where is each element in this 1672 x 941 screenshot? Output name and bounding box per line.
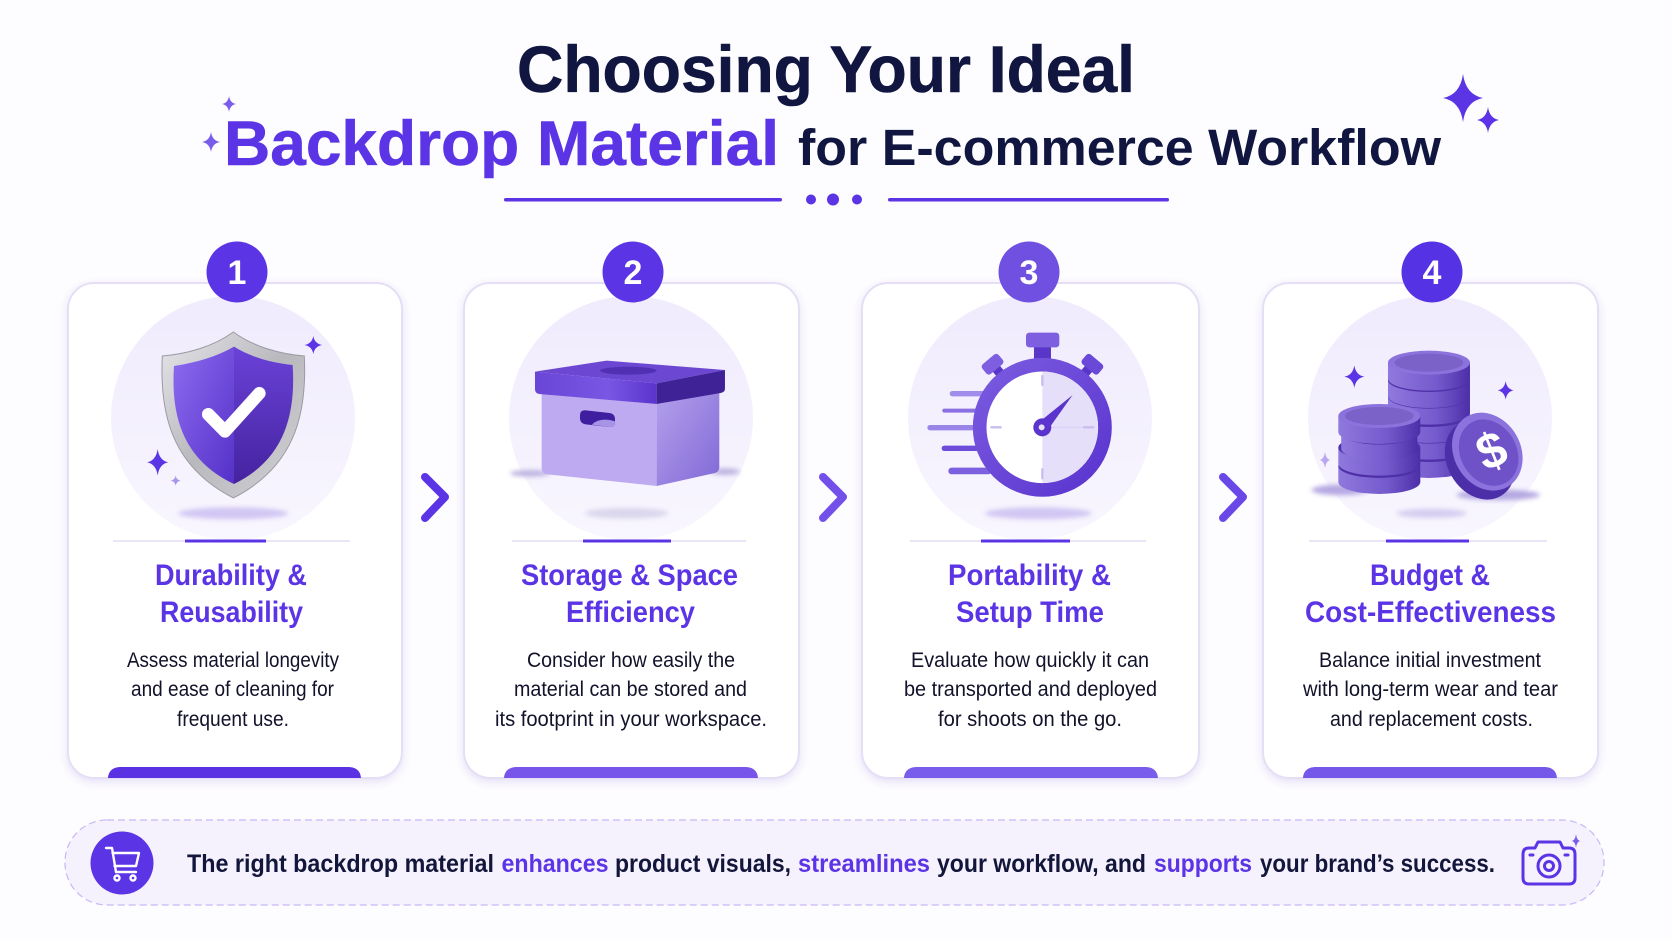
heading: Budget & (1370, 559, 1490, 592)
icon: shield with check (147, 332, 322, 519)
card background (68, 283, 402, 778)
step number badge: 1 (228, 254, 246, 292)
card background (1263, 283, 1598, 778)
description: and replacement costs. (1330, 708, 1533, 731)
accent bar (504, 767, 758, 779)
description: frequent use. (177, 708, 289, 731)
icon backdrop circle (509, 296, 753, 540)
description: Consider how easily the (527, 649, 735, 672)
title line 2 remainder: for E-commerce Workflow (798, 119, 1441, 176)
accent bar (1303, 767, 1557, 779)
heading: Setup Time (956, 596, 1104, 629)
icon: storage box (510, 361, 740, 519)
heading (521, 559, 738, 629)
panel: budget and cost-effectiveness (1263, 242, 1598, 779)
arrow 1 (425, 477, 445, 518)
step number badge: 4 (1423, 254, 1442, 292)
icon: stopwatch (930, 333, 1105, 519)
heading: Efficiency (566, 596, 695, 629)
banner statement: supports (1154, 850, 1252, 878)
description (127, 649, 339, 731)
banner statement: product visuals, (615, 850, 791, 878)
divider (1309, 540, 1547, 542)
step number badge: 3 (1020, 254, 1038, 292)
accent bar (108, 767, 361, 779)
panel: portability and setup time (862, 242, 1199, 779)
title line 2 highlighted: Backdrop Material (224, 109, 779, 179)
card background (464, 283, 799, 778)
heading: Cost-Effectiveness (1305, 596, 1556, 629)
description: its footprint in your workspace. (495, 708, 767, 731)
icon backdrop circle (111, 296, 355, 540)
description: Balance initial investment (1319, 649, 1541, 672)
banner statement (187, 850, 1495, 878)
icon: shopping cart (90, 832, 154, 894)
description: with long-term wear and tear (1302, 678, 1558, 701)
heading: Storage & Space (521, 559, 738, 592)
icon: coin stacks (1312, 351, 1540, 518)
description (495, 649, 767, 731)
heading (1305, 559, 1556, 629)
step number badge (206, 242, 268, 302)
description (1302, 649, 1558, 731)
divider (910, 540, 1146, 542)
heading: Portability & (948, 559, 1111, 592)
heading (948, 559, 1111, 629)
banner statement: The right backdrop material (187, 850, 494, 878)
icon: camera (1523, 834, 1580, 884)
description: Evaluate how quickly it can (911, 649, 1149, 672)
banner statement: enhances (502, 850, 608, 878)
description (904, 649, 1157, 731)
heading (155, 559, 307, 629)
divider (113, 540, 350, 542)
title sparkles (202, 74, 1499, 152)
heading: Durability & (155, 559, 307, 592)
step number badge (602, 242, 664, 302)
step number badge: 2 (624, 254, 642, 292)
title divider (504, 194, 1169, 206)
title line 1: Choosing Your Ideal (517, 32, 1135, 106)
divider (512, 540, 746, 542)
step number badge (1402, 242, 1462, 302)
title (224, 32, 1441, 179)
arrow 3 (1223, 477, 1243, 518)
description: Assess material longevity (127, 649, 339, 672)
description: and ease of cleaning for (131, 678, 334, 701)
banner statement: your brand’s success. (1260, 850, 1495, 878)
panel: storage and space efficiency (464, 242, 799, 779)
card background (862, 283, 1199, 778)
banner background (65, 820, 1604, 905)
banner (65, 820, 1604, 905)
description: for shoots on the go. (938, 708, 1122, 731)
banner statement: your workflow, and (937, 850, 1146, 878)
icon backdrop circle (908, 296, 1152, 540)
icon backdrop circle (1308, 296, 1552, 540)
accent bar (904, 767, 1158, 779)
panel: durability and reusability (68, 242, 402, 779)
step number badge (998, 242, 1060, 302)
heading: Reusability (160, 596, 303, 629)
description: be transported and deployed (904, 678, 1157, 701)
arrow 2 (823, 477, 843, 518)
icon: coin stacks: $ (1468, 419, 1515, 482)
description: material can be stored and (514, 678, 747, 701)
banner statement: streamlines (798, 850, 930, 878)
